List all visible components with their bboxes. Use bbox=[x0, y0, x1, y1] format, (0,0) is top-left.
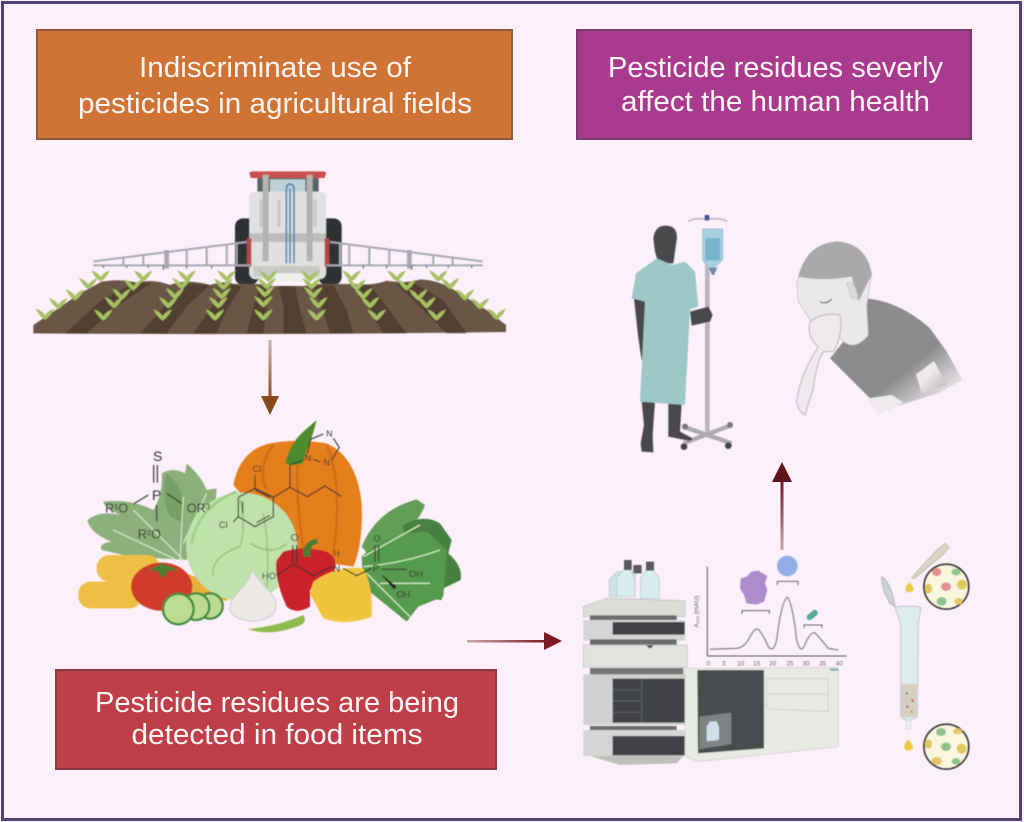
chromatogram bbox=[694, 567, 847, 667]
magnified sample bottom bbox=[924, 724, 969, 769]
chemical structure: triazole fungicide: Cl bbox=[219, 520, 228, 530]
spray tank bbox=[247, 175, 329, 281]
chromatogram: 15 bbox=[753, 660, 761, 667]
illustration: patient with IV drip bbox=[632, 215, 733, 452]
arrow: analysis to health bbox=[772, 462, 792, 550]
IV bag bbox=[703, 229, 723, 275]
chemical structure: organophosphate: R²O bbox=[138, 527, 161, 541]
chemical structure: glyphosate: P bbox=[373, 564, 380, 575]
right spray boom bbox=[327, 242, 483, 270]
head bbox=[797, 242, 872, 345]
heading: human health bbox=[577, 30, 971, 139]
chemical structure: organophosphate: P bbox=[152, 487, 161, 503]
illustration: vegetables with pesticide structures bbox=[78, 420, 461, 632]
illustration: SPE column bbox=[882, 543, 969, 769]
chromatogram: 20 bbox=[769, 660, 777, 667]
hand and forearm bbox=[797, 314, 841, 415]
chromatogram: 5 bbox=[722, 660, 726, 667]
crop seedlings bbox=[36, 270, 506, 321]
chemical structure: triazole fungicide: N bbox=[323, 457, 330, 467]
chromatogram: 40 bbox=[836, 660, 843, 667]
stomach hand bbox=[868, 395, 903, 416]
heading: indiscriminate use of pesticides: Indiscriminate use of bbox=[139, 52, 412, 84]
magnified sample top bbox=[924, 564, 969, 609]
chromatogram: 0 bbox=[707, 660, 711, 667]
red bell pepper bbox=[276, 538, 336, 611]
protein green bbox=[806, 609, 819, 621]
protein blue bbox=[777, 556, 798, 576]
pea pod bbox=[247, 615, 305, 632]
mass spectrometer bbox=[685, 667, 838, 762]
chemical structure: organophosphate: OR³ bbox=[187, 502, 210, 516]
chromatogram: 25 bbox=[786, 660, 794, 667]
heading: residues detected in food: detected in food items bbox=[132, 719, 422, 751]
chemical structure: organophosphate: S bbox=[153, 448, 162, 464]
sample droplet top bbox=[905, 582, 914, 592]
leafy greens left bbox=[87, 463, 217, 560]
cucumber slices bbox=[163, 593, 223, 624]
chemical structure: glyphosate: N bbox=[333, 564, 340, 575]
heading: residues detected in food: Pesticide residues are being bbox=[95, 687, 459, 719]
patient body bbox=[634, 226, 713, 452]
chemical structure: organophosphate bbox=[105, 448, 210, 541]
left spray boom bbox=[93, 242, 250, 270]
tractor wheels bbox=[235, 218, 342, 285]
cabbage bbox=[186, 492, 297, 601]
chemical structure: triazole fungicide: N bbox=[305, 453, 311, 463]
illustration: tractor spraying field bbox=[33, 171, 506, 334]
chemical structure: glyphosate: O bbox=[291, 533, 299, 544]
heading: human health: affect the human health bbox=[621, 86, 930, 118]
chemical structure: glyphosate: OH bbox=[396, 589, 410, 599]
chemical structure: glyphosate: H bbox=[334, 549, 340, 559]
yellow bell pepper bbox=[310, 568, 372, 622]
shirt bbox=[830, 298, 963, 405]
hospital gown bbox=[632, 258, 698, 405]
chemical structure: triazole fungicide: Cl bbox=[253, 464, 261, 474]
chemical structure: glyphosate: HO bbox=[262, 571, 276, 581]
illustration: LC-MS instrument bbox=[583, 556, 847, 765]
garlic bbox=[230, 570, 276, 621]
chromatogram: 30 bbox=[802, 660, 810, 667]
illustration: person feeling nauseous bbox=[797, 242, 963, 416]
far arm bbox=[916, 361, 947, 393]
tractor cab bbox=[249, 171, 326, 194]
chromatogram: A₂₈₀ (mAU) bbox=[694, 596, 701, 628]
pumpkin bbox=[233, 420, 362, 567]
column bbox=[882, 577, 921, 729]
tomato bbox=[131, 563, 192, 611]
heading: indiscriminate use of pesticides bbox=[37, 30, 512, 139]
solvent bottles bbox=[609, 560, 659, 598]
HPLC stack bbox=[583, 598, 687, 765]
chromatogram: 35 bbox=[819, 660, 827, 667]
arrow: food to analysis bbox=[467, 632, 562, 650]
heading: indiscriminate use of pesticides: pesticides in agricultural fields bbox=[78, 88, 472, 120]
chemical structure: glyphosate: OH bbox=[409, 569, 423, 579]
chemical structure: triazole fungicide bbox=[219, 429, 342, 530]
greens right bbox=[362, 499, 461, 622]
chemical structure: triazole fungicide: N bbox=[326, 429, 332, 439]
arrow: field to food bbox=[261, 340, 279, 415]
heading: residues detected in food bbox=[56, 670, 496, 769]
chemical structure: organophosphate: R¹O bbox=[105, 502, 128, 516]
IV pole bbox=[681, 215, 733, 450]
yellow squash bbox=[78, 555, 235, 608]
protein purple bbox=[740, 571, 767, 605]
soil field bbox=[33, 279, 506, 334]
chemical structure: glyphosate bbox=[262, 533, 423, 599]
sample droplet bottom bbox=[904, 739, 913, 751]
heading: human health: Pesticide residues severly bbox=[608, 52, 943, 84]
pipette bbox=[912, 543, 949, 579]
chemical structure: glyphosate: O bbox=[373, 534, 381, 544]
chromatogram: 10 bbox=[737, 660, 745, 667]
